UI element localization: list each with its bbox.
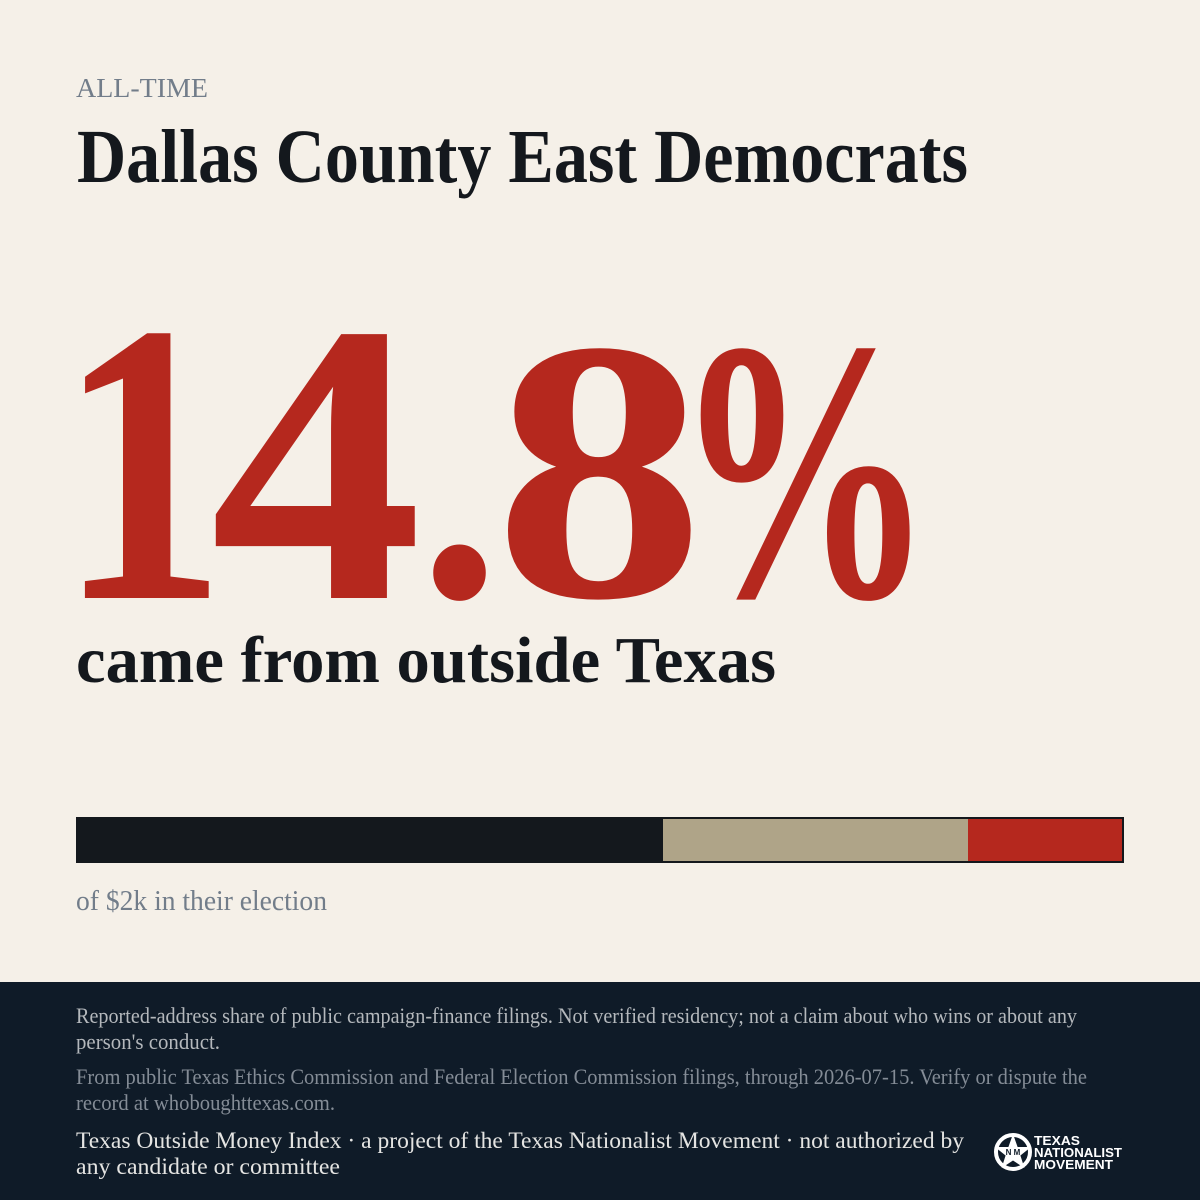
- logo: Texas Nationalist Movement: N M: [1006, 1148, 1021, 1157]
- big percentage: .: [419, 285, 500, 672]
- footer panel: [0, 982, 1200, 1200]
- source text: record at whoboughttexas.com.: [76, 1090, 335, 1115]
- disclaimer text: person's conduct.: [76, 1029, 220, 1054]
- bar caption: of $2k in their election: [76, 885, 327, 917]
- attribution text: Texas Outside Money Index · a project of the Texas Nationalist Movement · not authorized by: [76, 1128, 964, 1153]
- disclaimer text: Reported-address share of public campaign-finance filings. Not verified residency; not a claim about who wins or about any: [76, 1003, 1077, 1028]
- source text: [76, 1064, 1087, 1115]
- logo: Texas Nationalist Movement: TEXAS: [1034, 1133, 1080, 1148]
- big percentage: [58, 241, 934, 686]
- source text: From public Texas Ethics Commission and Federal Election Commission filings, through 2026-07-15. Verify or dispute the: [76, 1064, 1087, 1089]
- logo: Texas Nationalist Movement: MOVEMENT: [1034, 1157, 1113, 1172]
- big percentage: 4: [210, 242, 423, 685]
- title: Dallas County East Democrats: [77, 115, 968, 199]
- attribution text: [76, 1128, 964, 1179]
- subheading: came from outside Texas: [76, 624, 776, 697]
- stacked share bar: [76, 817, 1124, 863]
- logo: Texas Nationalist Movement: [995, 1133, 1122, 1172]
- big percentage: 1: [58, 241, 226, 686]
- eyebrow label: ALL-TIME: [76, 73, 208, 103]
- big percentage: %: [674, 265, 934, 677]
- big percentage: 8: [494, 265, 705, 678]
- attribution text: any candidate or committee: [76, 1154, 340, 1179]
- disclaimer text: [76, 1003, 1077, 1054]
- logo: Texas Nationalist Movement: NATIONALIST: [1034, 1145, 1122, 1160]
